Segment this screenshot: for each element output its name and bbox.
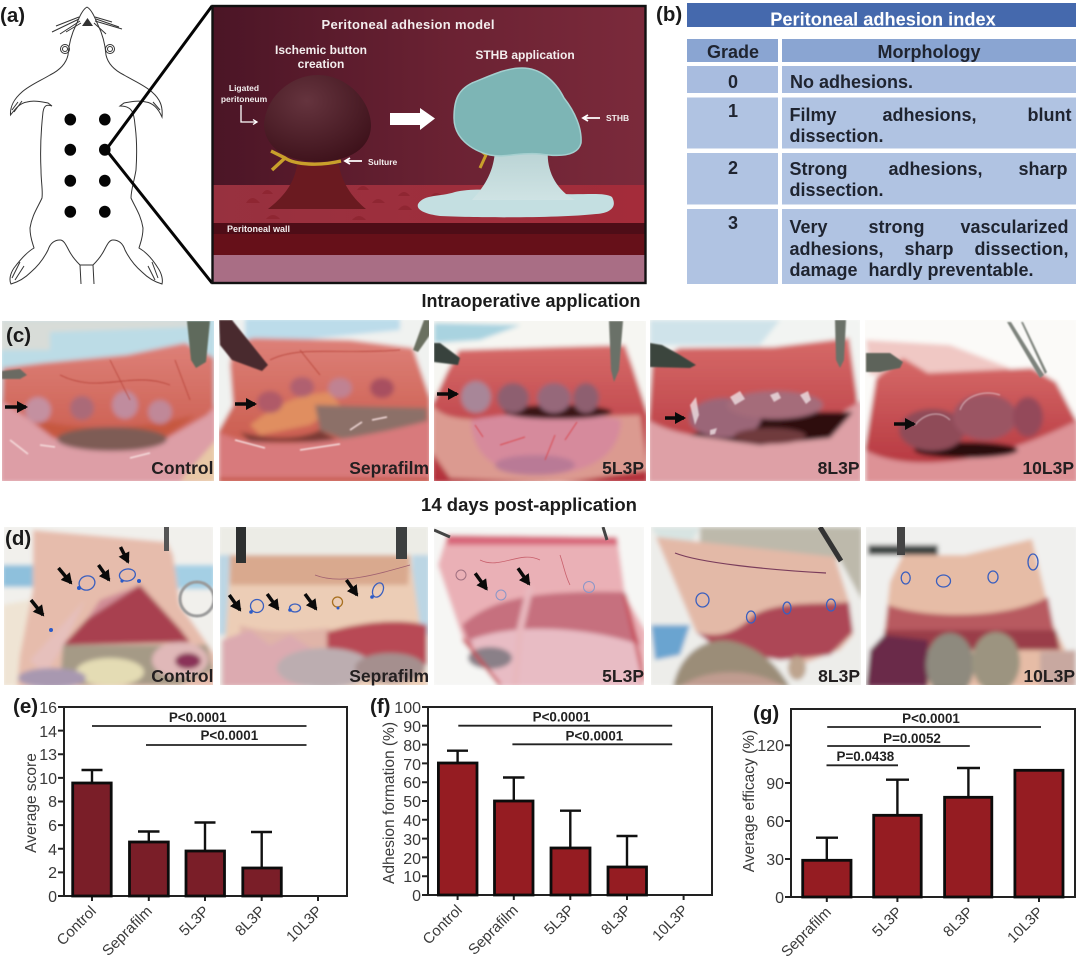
panel: peritoneal adhesion model xyxy=(212,6,646,283)
y ticks f: 30 xyxy=(403,832,421,849)
y ticks f: 20 xyxy=(403,851,421,868)
peritoneal wall layers xyxy=(212,6,646,283)
y ticks e: 16 xyxy=(39,700,57,717)
categories f: Seprafilm xyxy=(465,902,522,959)
y ticks e: 10 xyxy=(39,771,57,788)
chart g: average efficacy xyxy=(741,709,1075,961)
categories f: 5L3P xyxy=(541,902,578,939)
panel label (b): (b) xyxy=(656,3,682,26)
categories e: 8L3P xyxy=(232,903,269,940)
arrow: c control xyxy=(5,405,26,409)
significance f xyxy=(458,710,672,744)
grade 2 row xyxy=(687,153,1076,204)
suture label xyxy=(345,157,398,167)
arrow: c 5L3P xyxy=(437,392,457,396)
creation heading: creation xyxy=(298,57,344,71)
labels for row d xyxy=(151,666,1075,686)
panel: adhesion index table xyxy=(687,3,1076,284)
bars e xyxy=(73,783,281,896)
bars g xyxy=(803,770,1063,897)
significance e xyxy=(92,710,306,745)
STHB label xyxy=(583,113,629,123)
categories g xyxy=(778,904,1047,961)
categories f: 10L3P xyxy=(649,902,692,944)
labels for row c: Seprafilm xyxy=(349,458,429,478)
categories g: 8L3P xyxy=(940,904,977,941)
grade 3 row: dissection, xyxy=(974,239,1068,259)
implantation site dots xyxy=(64,114,111,218)
grade 1 row: dissection. xyxy=(790,126,884,146)
axes e xyxy=(58,707,347,901)
header row: Grade xyxy=(707,42,759,62)
mouse outline diagram xyxy=(10,7,162,284)
y ticks e: 0 xyxy=(48,889,57,906)
categories e xyxy=(54,903,326,960)
grade 1 row: Filmy xyxy=(790,105,837,125)
significance g: P=0.0052 xyxy=(883,731,941,746)
arrows: d 5L3P xyxy=(475,568,529,589)
y label e: Average score xyxy=(23,753,40,853)
labels for row c: 8L3P xyxy=(818,458,860,478)
significance g: P=0.0438 xyxy=(837,749,895,764)
panel label (c): (c) xyxy=(6,324,31,347)
photo row d xyxy=(2,525,1078,697)
categories g: 10L3P xyxy=(1004,904,1047,946)
suture xyxy=(271,151,341,170)
y ticks f: 10 xyxy=(403,869,421,886)
photo: 8L3P intraoperative xyxy=(648,318,862,483)
y ticks f: 0 xyxy=(412,888,421,905)
grade 1 row: 1 xyxy=(728,101,738,121)
arrow: c 8L3P xyxy=(665,416,684,420)
photo: seprafilm 14 days xyxy=(218,525,430,688)
error bars e xyxy=(82,770,272,868)
grade 1 row: adhesions, xyxy=(882,105,977,125)
y ticks f: 100 xyxy=(394,700,421,717)
STHB label: STHB xyxy=(606,113,629,123)
photo: seprafilm intraoperative xyxy=(217,318,431,483)
heading: intraoperative application: Intraoperative application xyxy=(421,291,641,311)
categories f: 8L3P xyxy=(598,902,635,939)
arrow: c seprafilm xyxy=(235,402,255,406)
categories f xyxy=(420,902,692,959)
y ticks e: 13 xyxy=(39,747,57,764)
categories e: 10L3P xyxy=(283,903,326,945)
grade 2 row: sharp xyxy=(1018,159,1068,179)
arrow: c 10L3P xyxy=(894,422,914,426)
photo: 5L3P intraoperative xyxy=(432,318,648,483)
categories e: Seprafilm xyxy=(99,903,156,960)
ischemic button heading: Ischemic button xyxy=(275,43,367,57)
photo: 10L3P intraoperative xyxy=(863,318,1078,483)
y label g: Average efficacy (%) xyxy=(741,730,758,872)
error bars g xyxy=(816,768,980,860)
suture label: Sulture xyxy=(368,157,398,167)
significance f: P<0.0001 xyxy=(533,710,591,724)
significance g xyxy=(826,711,1041,765)
labels for row d: 5L3P xyxy=(602,666,644,686)
grade 1 row: blunt xyxy=(1028,105,1072,125)
panel label (d): (d) xyxy=(5,527,31,550)
photo: 8L3P 14 days xyxy=(649,525,863,687)
labels for row d: 8L3P xyxy=(818,666,860,686)
grade 3 row: strong xyxy=(868,217,924,237)
y label f: Adhesion formation (%) xyxy=(381,722,398,884)
labels for row d: 10L3P xyxy=(1023,666,1075,686)
y ticks e: 2 xyxy=(48,865,57,882)
STHB base xyxy=(418,190,614,217)
grade 3 row: 3 xyxy=(728,213,738,233)
mouse nose triangle xyxy=(82,18,93,26)
labels for row d: Seprafilm xyxy=(349,666,429,686)
table title bar xyxy=(687,3,1076,30)
axes g xyxy=(785,709,1075,902)
panel label (f): (f) xyxy=(370,695,390,718)
y ticks g xyxy=(757,738,784,907)
y ticks g: 90 xyxy=(766,776,784,793)
photo: 10L3P 14 days xyxy=(864,525,1078,697)
y ticks f: 50 xyxy=(403,794,421,811)
error bars f xyxy=(447,751,638,867)
y ticks e xyxy=(39,700,57,906)
grade 1 row xyxy=(687,98,1076,148)
categories e: 5L3P xyxy=(176,903,213,940)
heading: 14 days post-application: 14 days post-application xyxy=(421,494,637,515)
arrow between stages xyxy=(390,108,435,130)
categories g: 5L3P xyxy=(869,904,906,941)
panel label (a): (a) xyxy=(0,4,25,27)
chart f: adhesion formation xyxy=(381,700,712,959)
ischemic button stem xyxy=(268,165,366,209)
labels for row c: Control xyxy=(151,458,214,478)
grade 3 row xyxy=(687,209,1076,284)
axes f xyxy=(422,707,712,900)
photo: control intraoperative xyxy=(0,318,216,483)
y ticks e: 4 xyxy=(48,842,57,859)
peritoneal wall label: Peritoneal wall xyxy=(227,224,290,234)
significance e: P<0.0001 xyxy=(169,710,227,725)
y ticks g: 60 xyxy=(766,814,784,831)
STHB suture tail xyxy=(476,147,486,168)
categories g: Seprafilm xyxy=(778,904,835,961)
header row xyxy=(687,39,1076,62)
STHB stem xyxy=(472,150,575,200)
model title: Peritoneal adhesion model xyxy=(322,17,494,32)
significance e: P<0.0001 xyxy=(200,728,259,743)
ischemic button ball xyxy=(264,75,371,162)
table title bar: Peritoneal adhesion index xyxy=(770,10,996,30)
arrows: d seprafilm xyxy=(229,580,357,610)
y ticks f xyxy=(394,700,421,905)
categories e: Control xyxy=(54,903,100,949)
grade 2 row: Strong xyxy=(790,159,848,179)
ligated peritoneum label: peritoneum xyxy=(221,94,268,104)
y ticks f: 40 xyxy=(403,813,421,830)
grade 0 row xyxy=(687,66,1076,93)
y ticks g: 0 xyxy=(775,890,784,907)
labels for row d: Control xyxy=(151,666,214,686)
labels for row c xyxy=(151,458,1074,478)
grade 3 row: damage xyxy=(790,260,858,280)
y ticks f: 60 xyxy=(403,775,421,792)
y ticks e: 14 xyxy=(39,724,57,741)
photo row c xyxy=(0,318,1078,483)
significance f: P<0.0001 xyxy=(566,728,624,744)
zoom lines from dot to model xyxy=(106,6,212,283)
grade 3 row: vascularized xyxy=(960,217,1068,237)
y ticks e: 6 xyxy=(48,818,57,835)
y ticks f: 70 xyxy=(403,757,421,774)
STHB gel cap xyxy=(454,68,581,156)
categories f: Control xyxy=(420,902,466,948)
arrows: d control xyxy=(31,547,128,615)
significance g: P<0.0001 xyxy=(902,711,960,726)
ligated peritoneum label xyxy=(221,83,268,124)
grade 0 row: No adhesions. xyxy=(790,72,913,92)
chart e: average score xyxy=(23,700,347,960)
y ticks g: 30 xyxy=(766,852,784,869)
y ticks g: 120 xyxy=(757,738,784,755)
grade 3 row: sharp xyxy=(904,239,954,259)
y ticks e: 8 xyxy=(48,794,57,811)
panel label (g): (g) xyxy=(753,702,779,725)
grade 2 row: 2 xyxy=(728,158,738,178)
photo: 5L3P 14 days xyxy=(432,525,646,687)
labels for row c: 5L3P xyxy=(602,458,644,478)
y ticks f: 80 xyxy=(403,738,421,755)
photo: control 14 days xyxy=(2,525,215,688)
y ticks f: 90 xyxy=(403,719,421,736)
grade 3 row: Very xyxy=(790,217,828,237)
grade 2 row: adhesions, xyxy=(888,159,983,179)
panel label (e): (e) xyxy=(13,695,38,718)
grade 0 row: 0 xyxy=(728,72,738,92)
ligated peritoneum label: Ligated xyxy=(229,83,259,93)
bars f xyxy=(438,763,646,895)
grade 3 row: adhesions, xyxy=(790,239,884,259)
STHB application heading: STHB application xyxy=(475,48,575,62)
header row: Morphology xyxy=(878,42,980,62)
grade 3 row: hardly preventable. xyxy=(868,260,1034,280)
grade 2 row: dissection. xyxy=(790,180,884,200)
labels for row c: 10L3P xyxy=(1022,458,1074,478)
